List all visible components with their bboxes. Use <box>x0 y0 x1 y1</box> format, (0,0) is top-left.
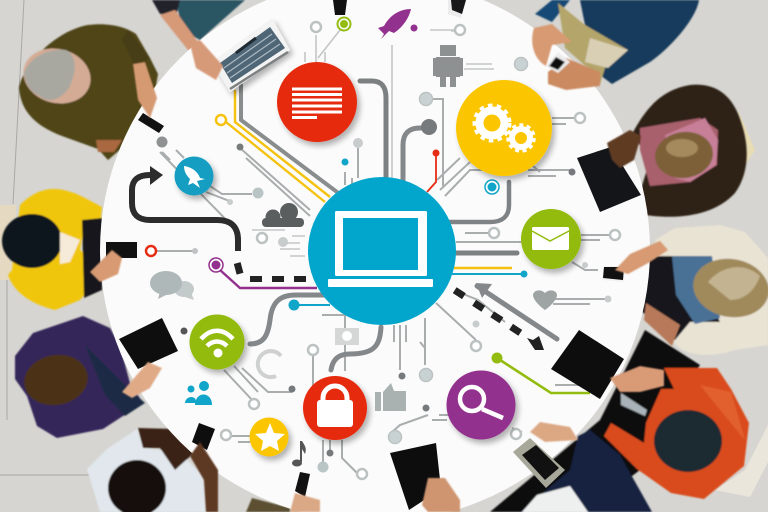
round table <box>100 0 650 512</box>
icon: music note <box>292 441 306 466</box>
blue lines <box>294 274 524 305</box>
person: plaid shirt, left <box>15 316 145 438</box>
icon: heart <box>533 290 557 310</box>
person: orange sweater, lower right <box>604 368 749 499</box>
icon: reload <box>258 351 281 377</box>
black dashed lines <box>234 262 544 350</box>
person: yellow sweater, left <box>2 189 105 310</box>
node: purple search <box>446 370 516 440</box>
person: olive jacket, top left <box>17 24 158 160</box>
icon: thumbs up <box>375 383 406 411</box>
node: green wifi <box>190 314 244 370</box>
node: yellow gears <box>456 80 552 176</box>
person: white shirt dark skin, bottom left <box>87 428 207 512</box>
node: central laptop <box>308 177 456 325</box>
grey tube connectors <box>241 81 557 370</box>
person: blonde with cream cardigan, right <box>640 225 768 355</box>
person: brown sweater, right <box>632 85 747 217</box>
person: bottom partial <box>246 498 290 512</box>
circuit network lines <box>132 18 620 479</box>
person: top left partial <box>152 0 245 60</box>
yellow lines <box>226 90 512 268</box>
icon: cloud <box>262 203 304 227</box>
person: navy suit, bottom right <box>520 430 652 512</box>
icon: speech bubbles <box>150 271 194 300</box>
node: red document <box>277 62 357 142</box>
green line <box>497 358 590 393</box>
icon: people <box>185 381 212 405</box>
purple line <box>220 270 317 288</box>
black curved arrow <box>132 166 238 251</box>
node: green mail <box>521 209 581 269</box>
red line <box>427 153 436 192</box>
device: laptop on table <box>212 18 290 92</box>
person: navy sweater, top right <box>530 0 699 84</box>
node: yellow star <box>250 418 288 456</box>
icon: rocket purple <box>378 9 411 39</box>
icon: robot <box>433 45 463 87</box>
grey arrow head <box>476 283 492 298</box>
hands resting on the table <box>90 24 668 512</box>
devices: phones and tablets <box>106 0 641 510</box>
node: blue rocket <box>174 156 214 196</box>
circuit nodes <box>146 18 620 479</box>
dark under table, right <box>490 330 700 512</box>
node: red lock <box>303 376 367 440</box>
icon: camera <box>335 328 359 345</box>
